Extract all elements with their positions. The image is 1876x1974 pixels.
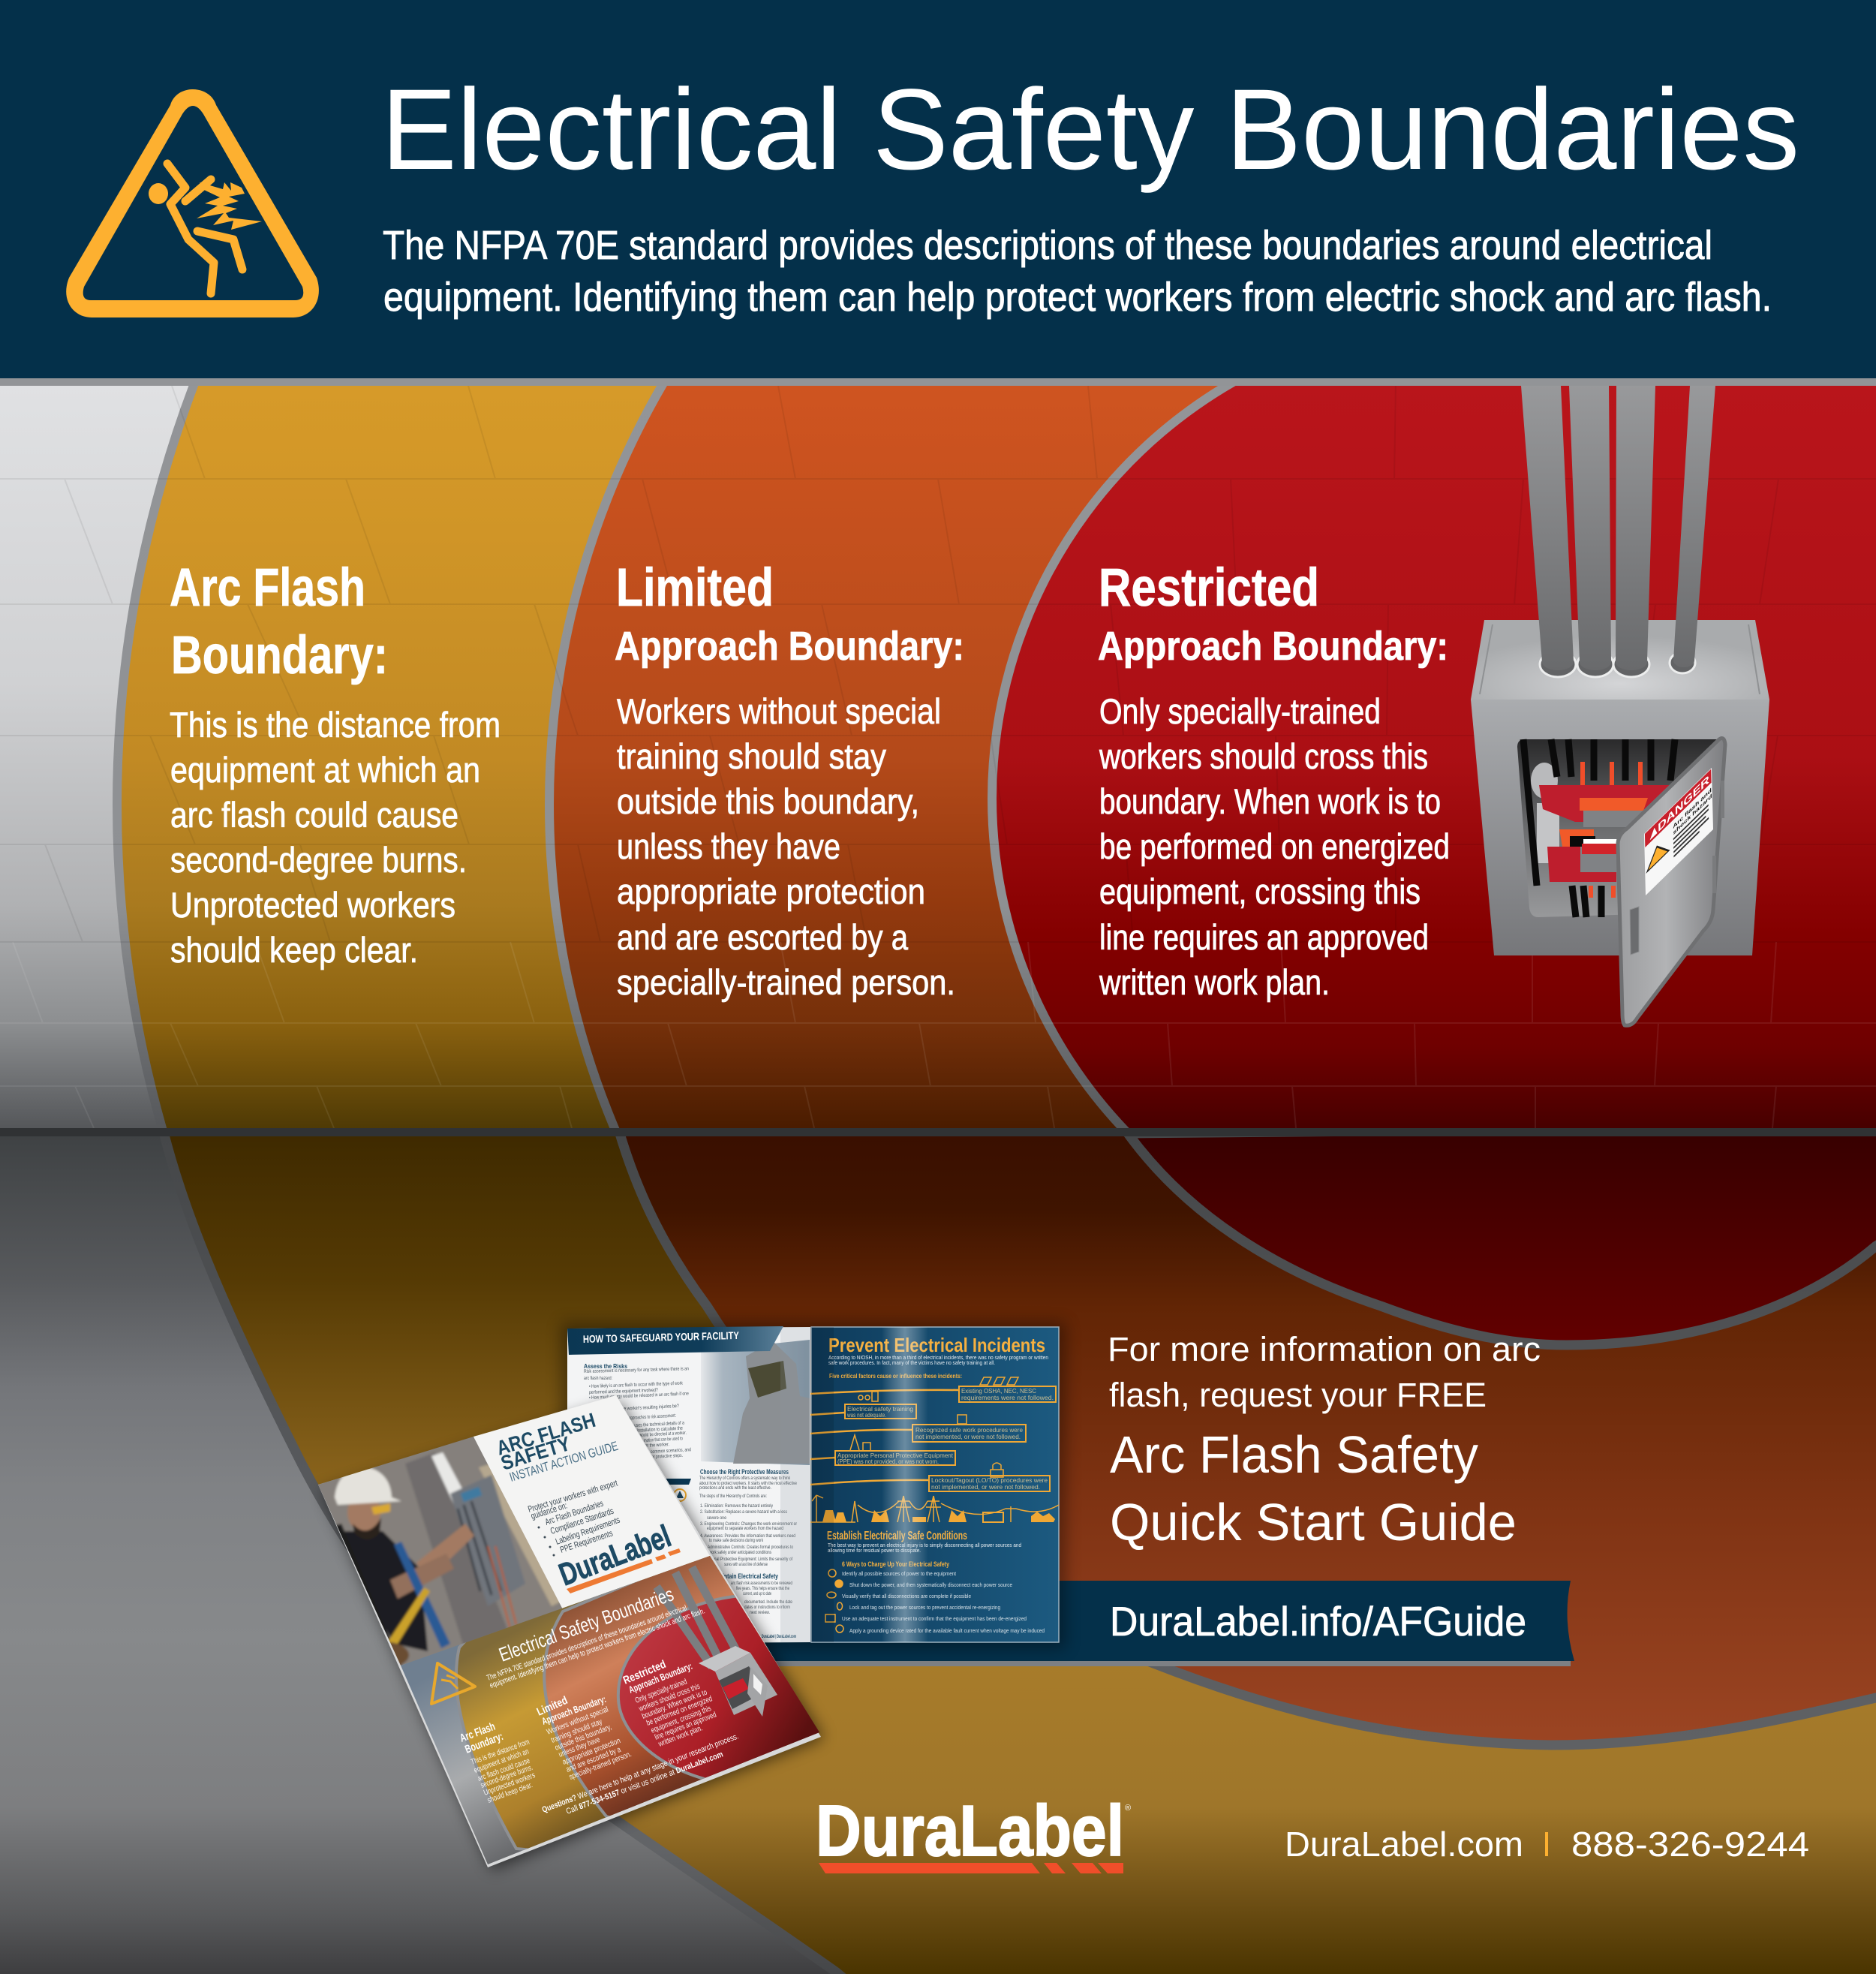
text: restricted approach description: workers should cross this	[1099, 736, 1428, 776]
text: arc flash description: Unprotected workers	[170, 885, 455, 925]
heading: restricted approach boundary: Approach Boundary:	[1098, 624, 1448, 669]
cover title panel: INSTANT ACTION GUIDE	[508, 1439, 620, 1485]
booklet: front cover	[315, 1395, 840, 1876]
cover infographic text: second-degree burns.	[480, 1763, 534, 1790]
text: restricted approach description: equipment, crossing this	[1099, 871, 1421, 911]
header description: The NFPA 70E standard provides descriptions of these boundaries around electrical	[383, 223, 1712, 268]
left page: current, and up to date	[743, 1591, 771, 1596]
text: guide request: Arc Flash Safety	[1110, 1425, 1478, 1484]
left page: • How likely is an arc flash to occur with the type of work	[589, 1381, 684, 1389]
cover title panel: Labeling Requirements	[554, 1515, 621, 1547]
cover infographic text: The NFPA 70E standard provides descriptions of these boundaries around electrical	[486, 1603, 688, 1683]
conduit pipes	[1521, 386, 1715, 670]
left page: The Hierarchy of Controls offers a systematic way to think	[699, 1476, 791, 1481]
cover infographic text: workers should cross this	[637, 1682, 701, 1714]
text: arc flash description: This is the distance from	[170, 705, 501, 745]
left page: intain Electrical Safety	[723, 1572, 778, 1580]
right page: prevent electrical incidents: safe work procedures. In fact, many of the victims have no safety training at all.	[828, 1359, 995, 1366]
arc flash boundary floor zone	[162, 1126, 1876, 1974]
left page: arc flash risk assessments to be reviewed	[731, 1581, 792, 1586]
cover infographic text: Boundary:	[463, 1730, 505, 1756]
cover infographic text: Electrical Safety Boundaries	[496, 1582, 677, 1666]
logo: DuraLabel: ®	[1125, 1804, 1131, 1813]
cover infographic text: specially-trained person.	[568, 1750, 633, 1782]
right page: prevent electrical incidents: Electrical safety training	[847, 1405, 913, 1413]
cover title panel: ARC FLASH	[494, 1409, 598, 1460]
right page: prevent electrical incidents: Lockout/Tagout (LO/TO) procedures were	[931, 1476, 1048, 1484]
icons: factor pictograms	[850, 1377, 1018, 1477]
left page: HOW TO SAFEGUARD YOUR FACILITY	[583, 1329, 740, 1345]
cover title panel: SAFETY	[498, 1432, 573, 1475]
right page: prevent electrical incidents: Existing OSHA, NEC, NESC	[961, 1387, 1036, 1395]
text: restricted approach description: written work plan.	[1099, 962, 1330, 1002]
chart: five critical factors timeline	[810, 1386, 1056, 1491]
list: six safety steps	[842, 1572, 1045, 1634]
left page: next review.	[750, 1610, 770, 1615]
conduit collars	[1540, 651, 1695, 677]
text: restricted approach description: Only specially-trained	[1099, 691, 1381, 731]
left page: the worker's resulting injuries be?	[621, 1404, 679, 1412]
right page: prevent electrical incidents: (PPE) was not provided, or was not worn.	[837, 1458, 939, 1465]
left page: severe one	[707, 1515, 726, 1521]
text: restricted approach description: boundary. When work is to	[1099, 781, 1441, 821]
cover photo: technician at panel	[318, 1437, 562, 1666]
cover infographic text: line requires an approved	[654, 1710, 717, 1742]
left page: The steps of the Hierarchy of Controls are:	[699, 1494, 767, 1499]
left page: dates or instructions to inform	[744, 1605, 790, 1610]
wall background	[0, 386, 1876, 1128]
text: guide request: Quick Start Guide	[1110, 1493, 1517, 1551]
left page: 3. Engineering Controls: Changes the work environment or	[700, 1521, 798, 1527]
left page: about how to protect workers. It starts with the most effective	[699, 1481, 797, 1486]
cover title panel: Arc Flash Boundaries	[543, 1498, 605, 1527]
panel: arc flash boundary	[170, 558, 501, 970]
right page: prevent electrical incidents: not implemented, or were not followed.	[931, 1483, 1040, 1491]
cover infographic text: This is the distance from	[470, 1738, 531, 1767]
danger label on door: DANGER	[1658, 773, 1709, 835]
cover infographic text: equipment, crossing this	[650, 1704, 712, 1735]
left page: s installation to calculate the	[634, 1426, 683, 1434]
heading: limited approach boundary	[615, 558, 964, 669]
header description	[383, 223, 1772, 320]
heading: arc flash boundary: Boundary:	[171, 626, 388, 685]
limited approach boundary wall zone	[545, 386, 1218, 1128]
cover title panel: guidance on:	[530, 1500, 569, 1521]
list: six safety steps: Apply a grounding device rated for the available fault current when voltage may be induced	[849, 1629, 1045, 1634]
heading: arc flash boundary	[170, 558, 388, 685]
list: six safety steps: Shut down the power, and then systematically disconnect each power source	[849, 1583, 1012, 1588]
floor background	[0, 1136, 1876, 1974]
left page: equipment to separate workers from the hazard	[707, 1526, 783, 1531]
heading: limited approach boundary: Approach Boundary:	[615, 624, 964, 669]
heading: arc flash boundary: Arc Flash	[170, 558, 365, 618]
footer contact details: DuraLabel.com	[1285, 1825, 1523, 1864]
right page: prevent electrical incidents: The best way to prevent an electrical injury is to simply disconnecting all power sources and	[828, 1542, 1021, 1548]
right page: prevent electrical incidents: Appropriate Personal Protective Equipment	[837, 1452, 954, 1459]
callout ribbon with guide url	[750, 1581, 1574, 1666]
left page: protections and ends with the least effective.	[699, 1485, 771, 1491]
list: six safety steps: Identify all possible sources of power to the equipment	[842, 1572, 956, 1577]
cover infographic text: Questions? We are here to help at any stage in your research process.	[541, 1732, 740, 1815]
heading: limited approach boundary: Limited	[616, 558, 774, 618]
left page: arc flash hazard:	[584, 1376, 612, 1381]
left page: common scenarios, and	[651, 1447, 691, 1455]
left page: for the worker.	[644, 1442, 669, 1449]
icon: electrical box with conduits	[1471, 386, 1769, 1025]
danger label on door	[1644, 768, 1713, 895]
text: limited approach description: outside this boundary,	[617, 781, 919, 821]
icons: power grid skyline	[810, 1495, 1059, 1522]
panel: restricted approach boundary	[1098, 558, 1450, 1002]
right page: prevent electrical incidents: Five critical factors cause or influence these incidents:	[829, 1372, 962, 1380]
cover warning triangle	[431, 1663, 475, 1704]
right page: prevent electrical incidents: was not adequate.	[846, 1411, 886, 1419]
left page: uses the technical details of a	[634, 1420, 684, 1428]
right page: prevent electrical incidents: requirements were not followed.	[961, 1394, 1054, 1401]
wall and floor junction band	[0, 1128, 1876, 1136]
limited approach boundary floor zone	[618, 1126, 1876, 1745]
text: limited approach description: appropriate protection	[617, 871, 925, 911]
wall boundary rings	[0, 386, 1876, 1128]
cover title panel	[474, 1395, 710, 1612]
text: limited approach description: Workers without special	[617, 691, 941, 731]
restricted approach boundary wall zone	[992, 375, 1876, 1141]
right page: prevent electrical incidents: not implemented, or were not followed.	[915, 1433, 1021, 1440]
cover infographic text: equipment at which an	[473, 1747, 531, 1775]
text: restricted approach description: be performed on energized	[1099, 826, 1450, 866]
icon: arc flash warning triangle	[66, 89, 319, 317]
left page: Administrative Controls: Creates formal procedures to	[708, 1545, 793, 1550]
text: limited approach description: unless they have	[617, 826, 840, 866]
cover infographic text: should keep clear.	[486, 1780, 534, 1805]
text: restricted approach description	[1099, 691, 1450, 1002]
cover infographic text: Restricted	[621, 1658, 668, 1687]
left page: onal Protective Equipment: Limits the severity of	[712, 1557, 792, 1562]
left page	[567, 1326, 810, 1644]
restricted approach boundary floor zone	[1128, 1126, 1876, 1345]
cover infographic text	[458, 1582, 740, 1816]
cover infographic text: unless they have	[558, 1735, 601, 1759]
right page: prevent electrical incidents: 6 Ways to Charge Up Your Electrical Safety	[842, 1560, 949, 1568]
danger label on door: shock hazard	[1673, 793, 1712, 837]
cover infographic text: training should stay	[550, 1717, 604, 1745]
title: Electrical Safety Boundaries	[381, 65, 1799, 194]
left page: to make safe decisions during work	[709, 1538, 764, 1543]
footer contact details	[1285, 1825, 1809, 1864]
list: six safety steps: Lock and tag out the power sources to prevent accidental re-energizing	[849, 1605, 1000, 1611]
right page: prevent electrical incidents: Recognized safe work procedures were	[915, 1426, 1023, 1434]
left page: Choose the Right Protective Measures	[700, 1468, 789, 1476]
text: arc flash description: equipment at which an	[170, 750, 480, 790]
heading: establish electrically safe conditions: Establish Electrically Safe Conditions	[827, 1530, 967, 1542]
left page: approaches to risk assessment:	[629, 1413, 676, 1421]
text: arc flash description	[170, 705, 501, 970]
footer contact details: 888-326-9244	[1571, 1825, 1809, 1864]
cover infographic text: appropriate protection	[561, 1736, 622, 1767]
left page: documented. Include the date	[744, 1599, 792, 1605]
text: guide url: DuraLabel.info/AFGuide	[1110, 1598, 1526, 1644]
right page: prevent electrical incidents: allowing time for residual power to dissipate.	[828, 1547, 921, 1554]
text: arc flash description: should keep clear.	[170, 930, 418, 970]
cover title panel: PPE Requirements	[559, 1528, 614, 1555]
cover infographic text: equipment. Identifying them can help to protect workers from electric shock and arc flash.	[489, 1606, 706, 1690]
text: guide request: For more information on arc	[1108, 1330, 1541, 1368]
cover infographic text: Approach Boundary:	[627, 1660, 694, 1696]
text: guide request	[1108, 1330, 1541, 1551]
heading: restricted approach boundary	[1098, 558, 1448, 669]
cover title panel: Compliance Standards	[549, 1506, 615, 1536]
text: arc flash description: second-degree burns.	[170, 840, 467, 880]
panel: limited approach boundary	[615, 558, 964, 1002]
left page: • How much energy would be released in an arc flash if one	[589, 1391, 689, 1401]
cover infographic text: Limited	[535, 1694, 570, 1719]
arc flash boundary wall zone	[113, 386, 657, 1128]
text: limited approach description: and are escorted by a	[617, 917, 909, 957]
left page: 4. Awareness: Provides the information that workers need	[700, 1533, 795, 1539]
cover infographic text: Call 877-534-5157 or visit us online at DuraLabel.com	[565, 1750, 724, 1816]
cover infographic text: arc flash could cause	[477, 1756, 531, 1783]
text: limited approach description: specially-trained person.	[617, 962, 955, 1002]
cover infographic text: Workers without special	[546, 1705, 609, 1737]
cover infographic text: Approach Boundary:	[540, 1693, 608, 1727]
left page: performed and the equipment involved?	[589, 1388, 658, 1395]
cover infographic text: Only specially-trained	[634, 1677, 688, 1705]
left page: Risk assessment is necessary for any task where there is an	[584, 1366, 689, 1374]
cover infographic text: and are escorted by a	[565, 1745, 622, 1774]
cover infographic text: boundary. When work is to	[641, 1688, 708, 1721]
left page: five years. This helps ensure that the	[736, 1586, 789, 1591]
left page: mation that can be used to	[644, 1436, 683, 1443]
logo: DuraLabel: DuraLabel	[816, 1791, 1124, 1871]
cover infographic panel	[401, 1556, 819, 1864]
right page: prevent electrical incidents: According to NIOSH, in more than a third of electrical incidents, there was no safety program or written	[828, 1354, 1048, 1361]
cover infographic text: be performed on energized	[645, 1694, 714, 1728]
left page: would be directed at a worker.	[639, 1431, 687, 1438]
left page: sures with a last line of defense	[724, 1562, 768, 1567]
list: six safety steps: Use an adequate test instrument to confirm that the equipment has been de-energized	[842, 1617, 1027, 1622]
left page: 1. Elimination: Removes the hazard entirely	[700, 1503, 774, 1509]
cover title panel: Protect your workers with expert	[527, 1477, 619, 1515]
text: restricted approach description: line requires an approved	[1099, 917, 1429, 957]
cover infographic text: written work plan.	[657, 1723, 704, 1749]
left page: for protective steps.	[651, 1453, 683, 1460]
text: arc flash description: arc flash could cause	[170, 795, 458, 835]
heading: restricted approach boundary: Restricted	[1099, 558, 1319, 618]
text: limited approach description: training should stay	[617, 736, 886, 776]
left page: 2. Substitution: Replaces a severe hazard with a less	[700, 1509, 788, 1515]
cover infographic text: outside this boundary,	[554, 1723, 613, 1753]
right page heading: Prevent Electrical Incidents	[828, 1334, 1045, 1356]
booklet: open spread	[561, 1323, 1066, 1648]
header panel	[0, 0, 1876, 386]
list: six safety steps: Visually verify that all disconnections are complete if possible	[842, 1594, 971, 1599]
left page: DuraLabel | DuraLabel.com	[762, 1634, 796, 1639]
floor boundary rings	[162, 1126, 1876, 1974]
left page: Assess the Risks	[584, 1362, 627, 1370]
text: guide request: flash, request your FREE	[1109, 1376, 1487, 1414]
left page: work safely under anticipated conditions	[708, 1550, 772, 1555]
cover infographic text: Arc Flash	[458, 1720, 497, 1745]
danger label on door: Arc flash and	[1673, 787, 1712, 831]
cover infographic text: Unprotected workers	[483, 1771, 537, 1798]
cover title panel: DuraLabel	[555, 1518, 675, 1592]
right page: prevent electrical incidents	[810, 1327, 1059, 1642]
cover electrical box	[699, 1646, 777, 1717]
text: limited approach description	[617, 691, 955, 1002]
